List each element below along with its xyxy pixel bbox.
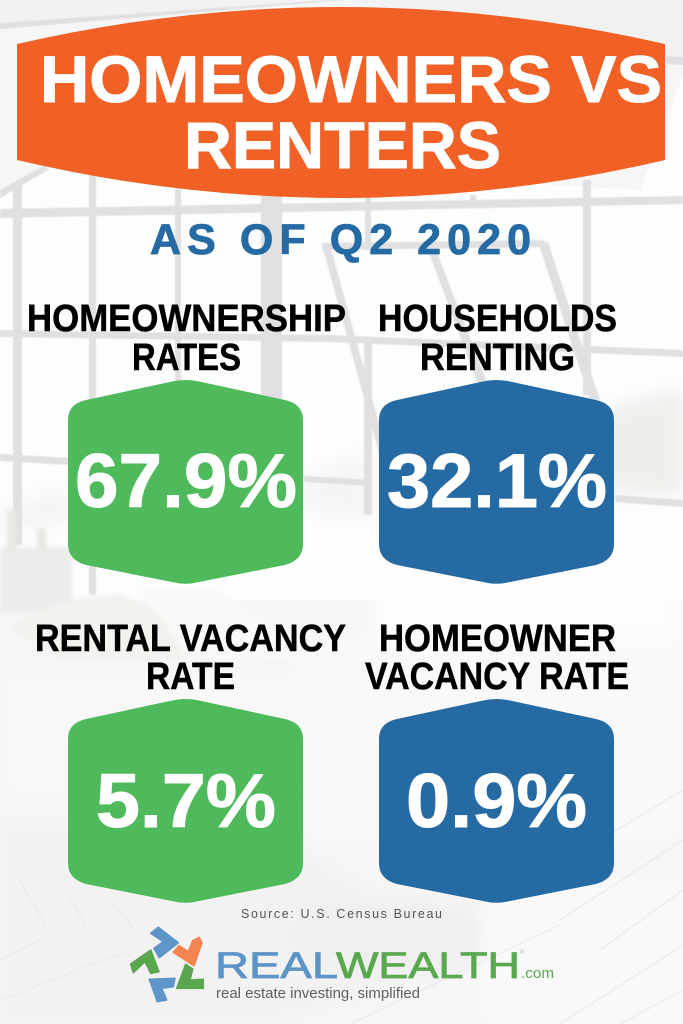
logo: RealWealth: .com bbox=[521, 966, 554, 982]
panel: rental vacancy rate bbox=[35, 618, 346, 903]
heading line 1: RENTAL VACANCY bbox=[35, 618, 346, 660]
value: 32.1% bbox=[387, 439, 607, 524]
wordmark: REAL bbox=[215, 945, 338, 986]
hexagon badge bbox=[68, 699, 303, 903]
title line 2: RENTERS bbox=[184, 108, 501, 182]
title line 1: HOMEOWNERS VS bbox=[40, 42, 662, 116]
hexagon badge bbox=[379, 380, 614, 584]
tagline: real estate investing, simplified bbox=[216, 985, 420, 1002]
logo: RealWealth: ® bbox=[520, 949, 525, 956]
hexagon badge bbox=[379, 699, 614, 903]
value: 67.9% bbox=[75, 439, 297, 524]
logo: RealWealth: WEALTH bbox=[336, 945, 520, 986]
panel: homeowner vacancy rate bbox=[365, 618, 629, 903]
icon: arrows pinwheel bbox=[131, 927, 203, 1002]
value: 0.9% bbox=[406, 759, 587, 844]
heading line 2: RATES bbox=[132, 337, 241, 379]
logo: RealWealth bbox=[131, 927, 554, 1002]
hexagon badge bbox=[68, 380, 303, 584]
title banner bbox=[17, 7, 665, 198]
heading line 1: HOMEOWNER bbox=[379, 618, 616, 660]
heading line 1: HOMEOWNERSHIP bbox=[27, 298, 346, 340]
source note: Source: U.S. Census Bureau bbox=[241, 907, 442, 921]
heading line 2: RENTING bbox=[420, 337, 575, 379]
heading line 2: RATE bbox=[146, 656, 235, 698]
value: 5.7% bbox=[96, 759, 276, 844]
heading line 2: VACANCY RATE bbox=[365, 656, 629, 698]
panel: households renting bbox=[378, 298, 617, 584]
heading line 1: HOUSEHOLDS bbox=[378, 298, 617, 340]
panel: homeownership rates bbox=[27, 298, 346, 584]
subtitle: AS OF Q2 2020 bbox=[150, 216, 531, 264]
